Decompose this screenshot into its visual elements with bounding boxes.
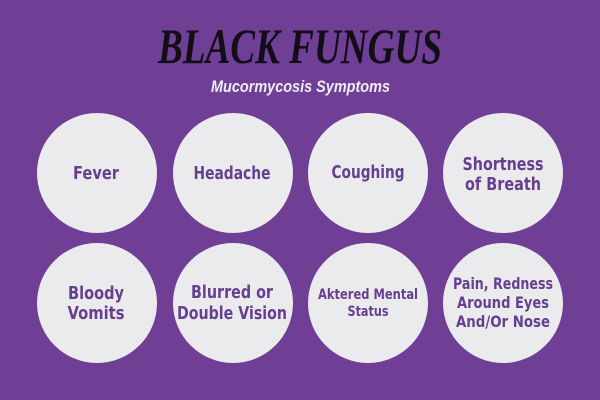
symptom: bloody vomits bbox=[37, 243, 157, 363]
symptom: blurred or double vision: Double Vision bbox=[177, 303, 287, 324]
symptom: pain, redness around eyes and/or nose: Around Eyes bbox=[457, 293, 549, 312]
symptom: coughing bbox=[308, 113, 428, 233]
symptom: headache: Headache bbox=[194, 163, 270, 184]
symptom: altered mental status bbox=[308, 243, 428, 363]
symptom: pain, redness around eyes and/or nose: And/Or Nose bbox=[456, 312, 550, 331]
symptom: shortness of breath bbox=[443, 113, 563, 233]
symptom: bloody vomits: Vomits bbox=[68, 303, 124, 324]
symptom: altered mental status: Aktered Mental bbox=[318, 287, 418, 303]
symptom: shortness of breath: Shortness bbox=[462, 154, 544, 175]
symptom: blurred or double vision: Blurred or bbox=[191, 282, 273, 303]
symptom: shortness of breath: of Breath bbox=[465, 174, 541, 195]
symptom: headache bbox=[173, 113, 293, 233]
symptom: pain, redness around eyes and/or nose: Pain, Redness bbox=[453, 274, 553, 293]
symptom: altered mental status: Status bbox=[348, 304, 388, 320]
symptom: pain, redness around eyes and/or nose bbox=[443, 243, 563, 363]
symptom: bloody vomits: Bloody bbox=[68, 283, 124, 304]
title: BLACK FUNGUS bbox=[157, 18, 442, 74]
symptom: coughing: Coughing bbox=[332, 162, 404, 183]
symptom: fever: Fever bbox=[73, 163, 119, 184]
subtitle: Mucormycosis Symptoms bbox=[211, 77, 390, 96]
symptom: blurred or double vision bbox=[173, 243, 293, 363]
symptom: fever bbox=[37, 113, 157, 233]
